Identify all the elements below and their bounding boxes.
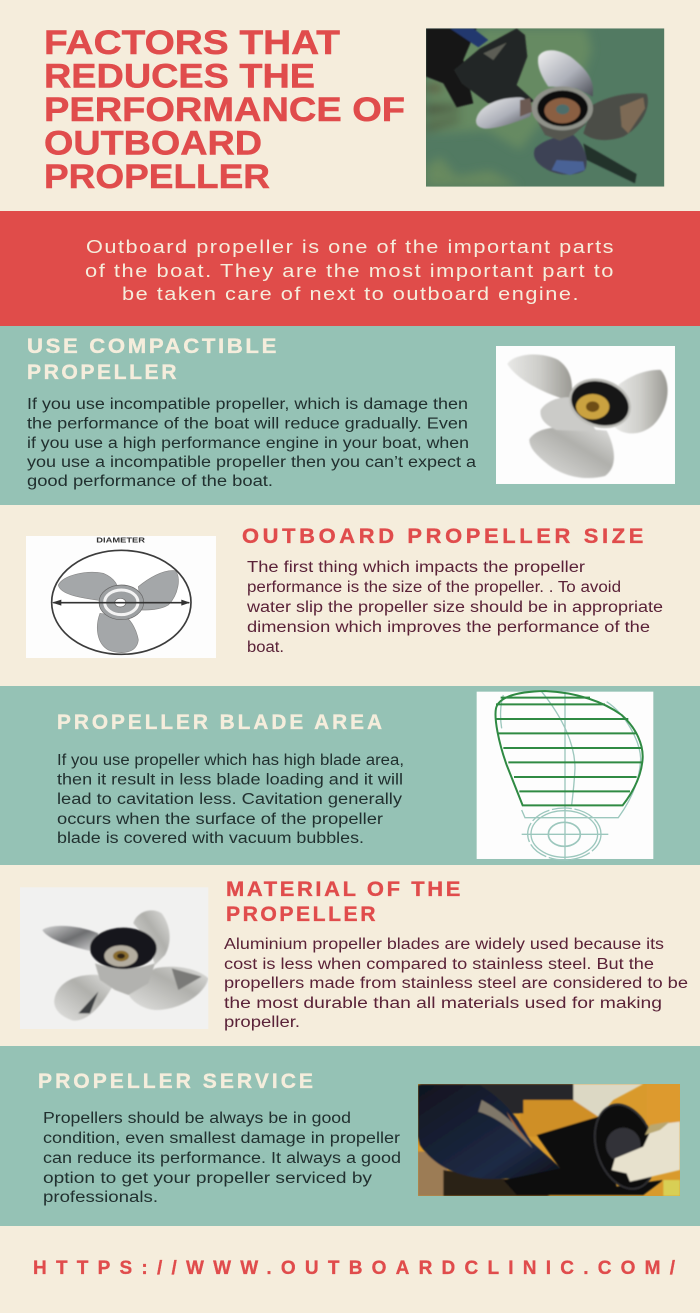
diagram: blade area drawing bbox=[477, 691, 653, 860]
diagram: propeller diameter bbox=[26, 536, 216, 658]
body text: propellers made from stainless steel are considered to be bbox=[224, 975, 688, 992]
intro text: be taken care of next to outboard engine. bbox=[122, 283, 580, 304]
footer url: HTTPS://WWW.OUTBOARDCLINIC.COM/ bbox=[33, 1258, 676, 1279]
body text bbox=[57, 752, 404, 847]
body text: the performance of the boat will reduce gradually. Even bbox=[27, 416, 468, 432]
section: propeller service bbox=[38, 1070, 680, 1206]
title bbox=[44, 24, 405, 196]
body text: occurs when the surface of the propeller bbox=[57, 811, 383, 828]
body text: boat. bbox=[247, 639, 284, 656]
body text: cost is less when compared to stainless steel. But the bbox=[224, 956, 654, 973]
body text: blade is covered with vacuum bubbles. bbox=[57, 830, 364, 847]
section: blade area bbox=[57, 691, 653, 860]
heading: PROPELLER BLADE AREA bbox=[57, 711, 385, 734]
body text: if you use a high performance engine in your boat, when bbox=[27, 435, 469, 452]
body text: If you use propeller which has high blade area, bbox=[57, 752, 404, 769]
heading: PROPELLER SERVICE bbox=[38, 1070, 316, 1093]
photo: propeller over green water bbox=[426, 28, 664, 187]
body text: the most durable than all materials used for making bbox=[224, 995, 662, 1012]
intro text: of the boat. They are the most important part to bbox=[85, 260, 615, 281]
band: service bbox=[0, 1046, 700, 1226]
body text: Aluminium propeller blades are widely used because its bbox=[224, 936, 664, 953]
heading bbox=[226, 878, 463, 926]
photo: stainless steel four-blade propeller bbox=[20, 887, 208, 1029]
intro text: Outboard propeller is one of the important parts bbox=[86, 236, 615, 257]
body text: water slip the propeller size should be in appropriate bbox=[246, 599, 663, 616]
band: material bbox=[0, 865, 700, 1046]
diagram: propeller diameter: DIAMETER bbox=[96, 536, 146, 545]
body text: performance is the size of the propeller. . To avoid bbox=[247, 579, 621, 596]
body text: then it result in less blade loading and it will bbox=[57, 772, 403, 788]
body text: propeller. bbox=[224, 1014, 300, 1031]
heading bbox=[27, 335, 279, 384]
body text: condition, even smallest damage in propeller bbox=[43, 1130, 400, 1147]
body text: Propellers should be always be in good bbox=[43, 1110, 351, 1127]
body text: lead to cavitation less. Cavitation generally bbox=[57, 791, 402, 808]
body text: If you use incompatible propeller, which is damage then bbox=[27, 396, 468, 413]
body text: option to get your propeller serviced by bbox=[43, 1170, 372, 1187]
body text bbox=[27, 396, 476, 490]
body text: professionals. bbox=[43, 1189, 158, 1206]
heading: MATERIAL OF THE bbox=[226, 878, 463, 901]
title: PERFORMANCE OF bbox=[44, 91, 405, 129]
heading: PROPELLER bbox=[27, 361, 179, 384]
title: FACTORS THAT bbox=[44, 24, 340, 62]
body text: The first thing which impacts the propeller bbox=[247, 559, 585, 576]
band: footer bbox=[0, 1226, 700, 1313]
body text: dimension which improves the performance of the bbox=[247, 619, 650, 636]
section: use compatible propeller bbox=[27, 335, 675, 490]
background band: header bbox=[0, 0, 700, 211]
title: REDUCES THE bbox=[44, 58, 315, 96]
heading: OUTBOARD PROPELLER SIZE bbox=[242, 525, 647, 548]
heading: PROPELLER bbox=[226, 903, 378, 926]
heading: USE COMPACTIBLE bbox=[27, 335, 279, 358]
body text bbox=[43, 1110, 401, 1206]
photo: silver three-blade propeller bbox=[496, 346, 675, 484]
body text: good performance of the boat. bbox=[27, 473, 273, 490]
band: compatible propeller bbox=[0, 326, 700, 505]
intro text bbox=[85, 236, 615, 304]
body text: can reduce its performance. It always a good bbox=[43, 1150, 401, 1167]
section: material bbox=[20, 878, 688, 1031]
body text: you use a incompatible propeller then you can’t expect a bbox=[27, 454, 476, 471]
band: intro bbox=[0, 211, 700, 326]
photo: propeller being serviced bbox=[418, 1084, 680, 1197]
band: propeller size bbox=[0, 505, 700, 686]
body text bbox=[246, 559, 663, 656]
band: blade area bbox=[0, 686, 700, 865]
title: OUTBOARD bbox=[44, 124, 262, 162]
body text bbox=[224, 936, 688, 1031]
title: PROPELLER bbox=[44, 158, 270, 196]
section: propeller size bbox=[26, 525, 663, 658]
